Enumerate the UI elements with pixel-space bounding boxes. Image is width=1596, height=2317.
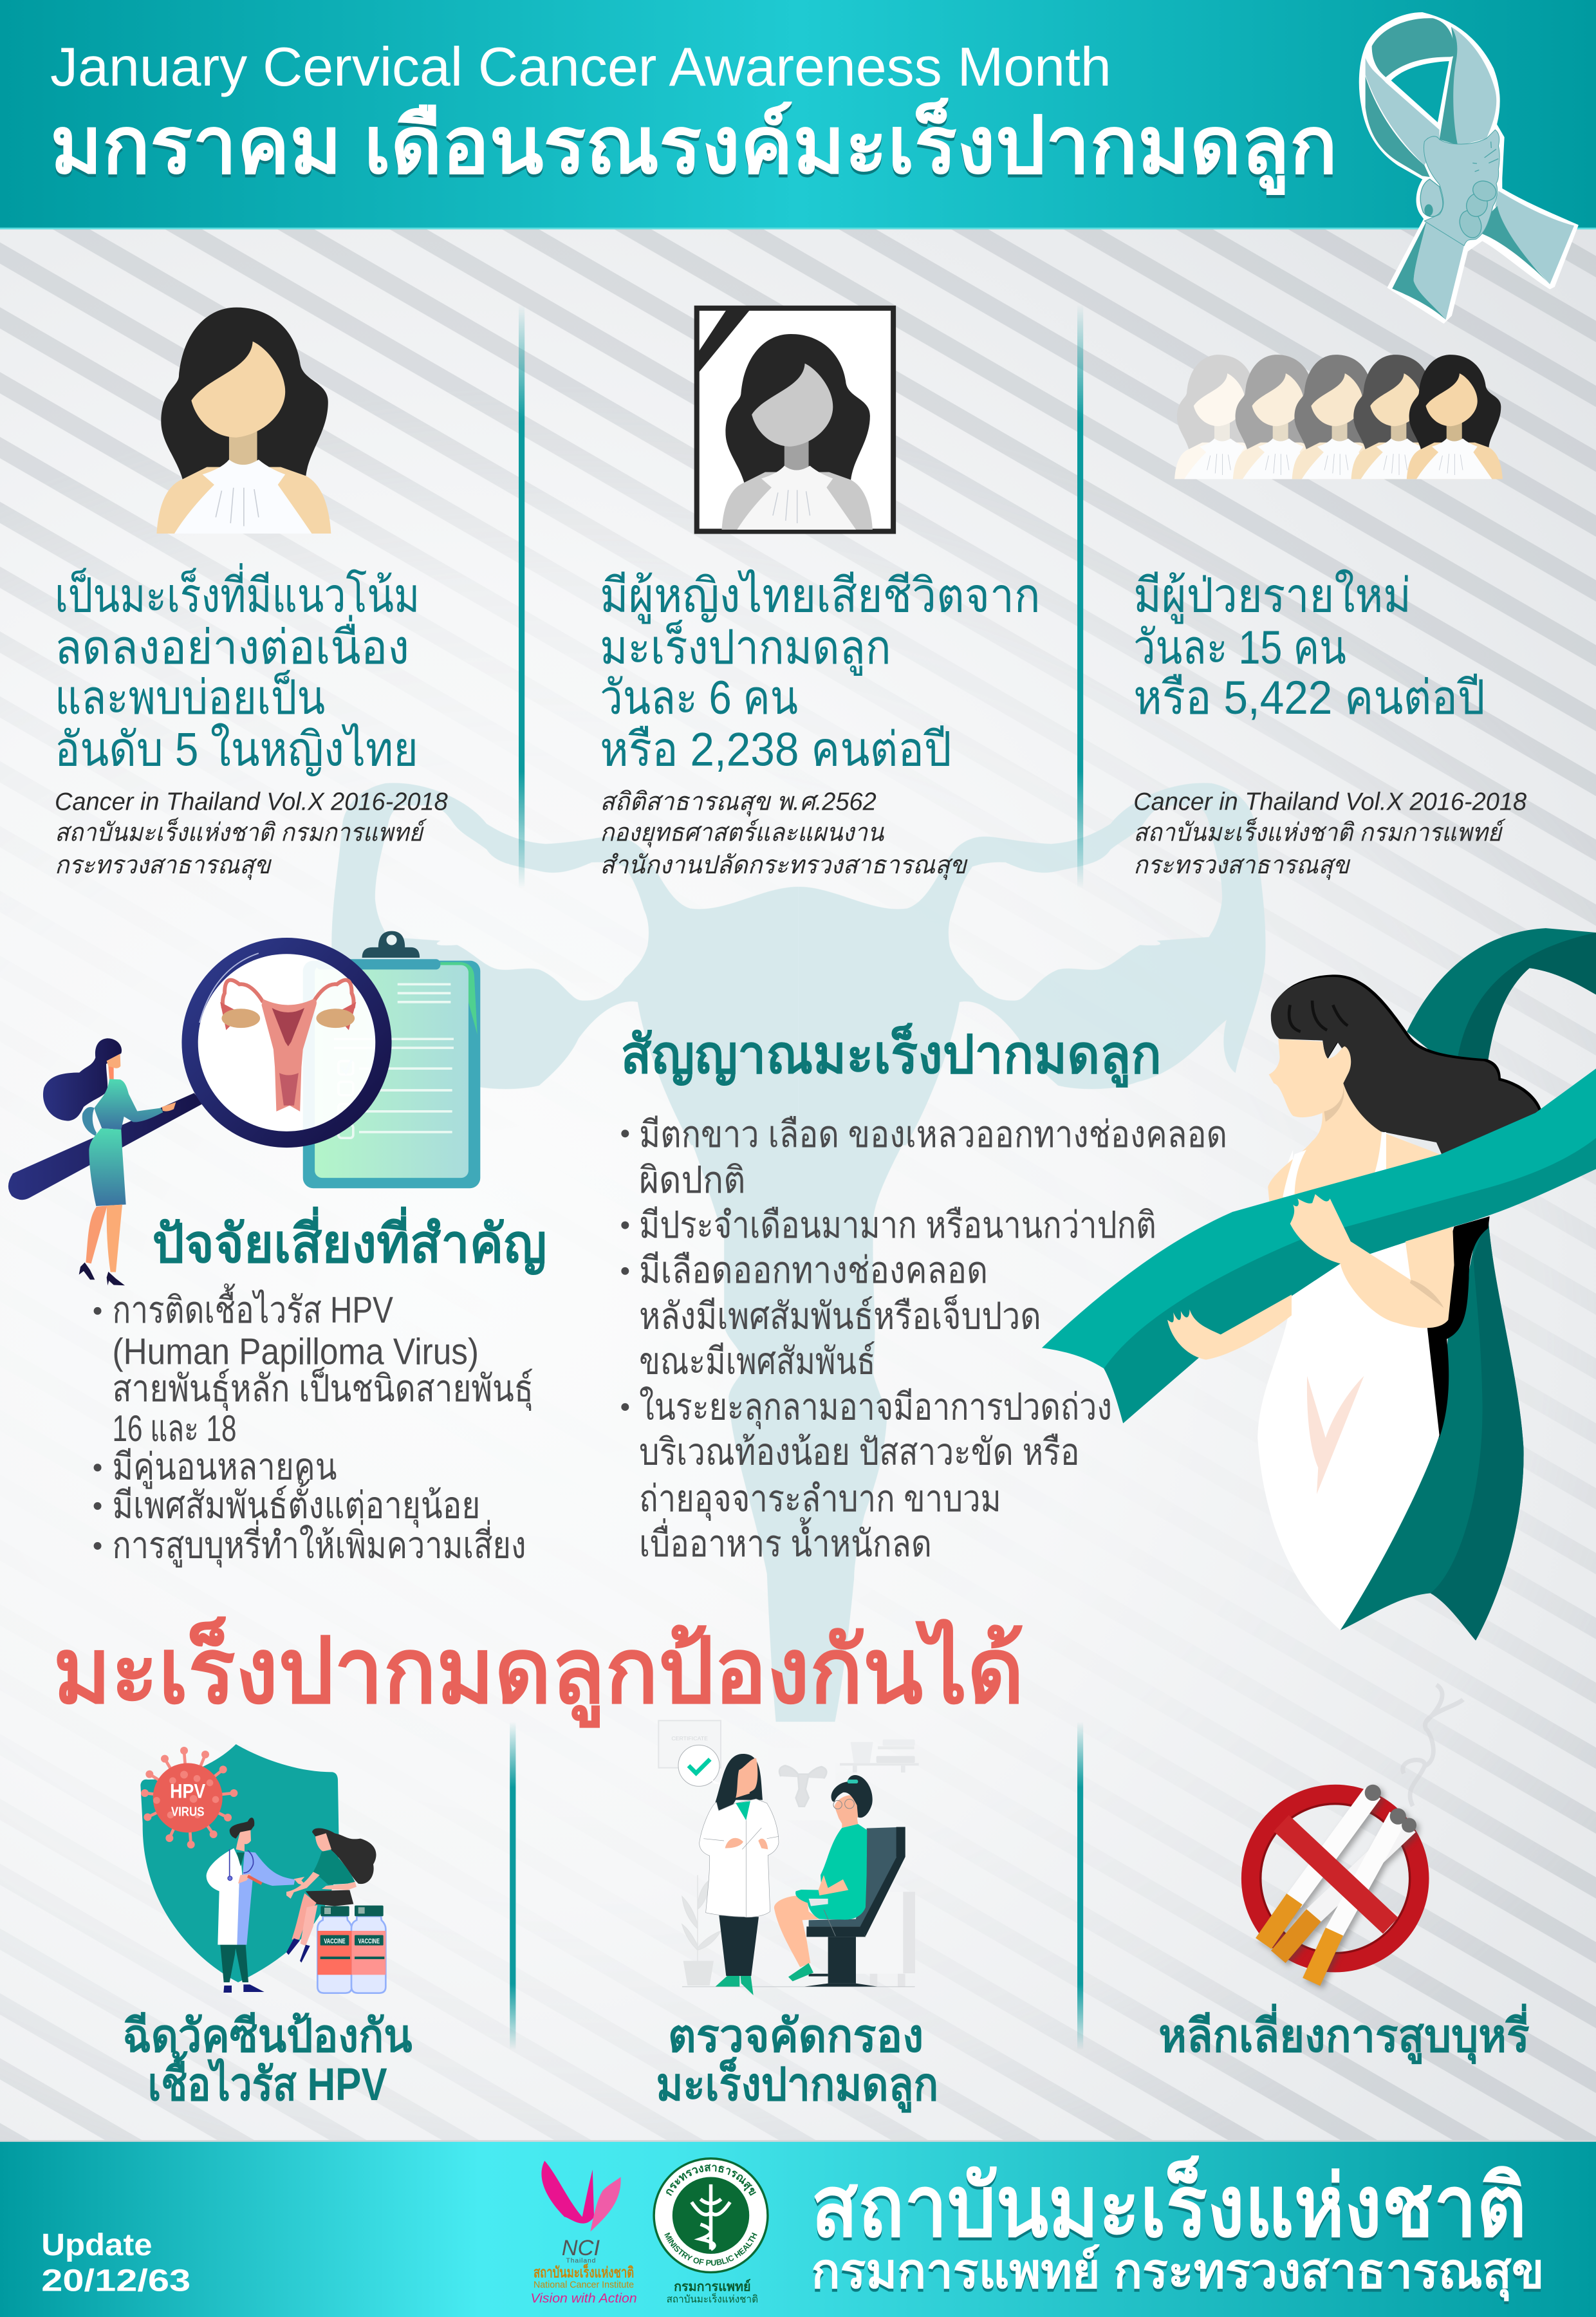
source text [55, 788, 448, 880]
statistic text: วันละ 6 คน [600, 671, 798, 724]
statistic text: ลดลงอย่างต่อเนื่อง [55, 615, 409, 674]
panel: vaccination [123, 1744, 413, 2110]
caption: screening [656, 2011, 938, 2113]
figure: patient in chair [774, 1775, 905, 1987]
risk factor list: มีเพศสัมพันธ์ตั้งแต่อายุน้อย [113, 1478, 480, 1528]
warning signs list: ถ่ายอุจจาระลำบาก ขาบวม [639, 1478, 1001, 1521]
hair [1271, 974, 1542, 1156]
source text: Cancer in Thailand Vol.X 2016-2018 [55, 788, 448, 815]
source text: Cancer in Thailand Vol.X 2016-2018 [1133, 788, 1526, 815]
illustration: clipboard and magnifier [8, 931, 480, 1285]
statistic text: มีผู้หญิงไทยเสียชีวิตจาก [600, 569, 1041, 624]
panel: avoid smoking [1158, 1685, 1530, 2064]
logo: Ministry of Public Health seal: กรมการแพทย์ [674, 2278, 751, 2294]
dividers: bottom row [510, 1722, 1083, 2050]
statistic text: อันดับ 5 ในหญิงไทย [55, 722, 418, 776]
warning signs list: หลังมีเพศสัมพันธ์หรือเจ็บปวด [639, 1294, 1041, 1337]
ribbon back loop [1407, 928, 1596, 1072]
logo: National Cancer Institute: Vision with Action [530, 2291, 637, 2306]
source text: กระทรวงสาธารณสุข [55, 851, 272, 880]
icon: memorial portrait [697, 308, 893, 532]
risk factor list: 16 และ 18 [113, 1408, 236, 1449]
logo: Ministry of Public Health seal: สถาบันมะเร็งแห่งชาติ [667, 2293, 758, 2305]
logo: Ministry of Public Health seal [653, 2157, 769, 2305]
icon: HPV virus [141, 1747, 237, 1848]
icon: prohibition ring [1251, 1794, 1420, 1962]
panel: new cases statistic [1133, 355, 1526, 880]
statistic text: หรือ 2,238 คนต่อปี [600, 722, 952, 776]
update date: 20/12/63 [41, 2263, 190, 2298]
warning signs list: บริเวณท้องน้อย ปัสสาวะขัด หรือ [639, 1432, 1079, 1473]
source text: สถาบันมะเร็งแห่งชาติ กรมการแพทย์ [55, 817, 427, 847]
logo: National Cancer Institute: สถาบันมะเร็งแห่งชาติ [534, 2263, 634, 2281]
icon: HPV virus: HPV [170, 1779, 205, 1802]
logo: National Cancer Institute: Thailand [566, 2258, 596, 2265]
risk factor list: สายพันธุ์หลัก เป็นชนิดสายพันธุ์ [113, 1366, 534, 1411]
panel: screening [656, 1720, 938, 2113]
panel: trend statistic [55, 308, 448, 880]
icon: prohibition bar [1281, 1823, 1391, 1926]
heading: key risk factors: ปัจจัยเสี่ยงที่สำคัญ [153, 1206, 547, 1276]
source text: สถิติสาธารณสุข พ.ศ.2562 [600, 788, 877, 817]
caption: vaccination: ฉีดวัคซีนป้องกัน [123, 2011, 413, 2061]
figure: woman with magnifier [43, 1038, 176, 1285]
risk factor list: มีคู่นอนหลายคน [113, 1447, 337, 1489]
faded clinic background: CERTIFICATE [671, 1735, 708, 1742]
heading: warning signs: สัญญาณมะเร็งปากมดลูก [620, 1022, 1162, 1088]
icon: HPV virus: VIRUS [171, 1805, 205, 1819]
icon: vaccine bottles [317, 1906, 385, 1993]
statistic text: เป็นมะเร็งที่มีแนวโน้ม [55, 563, 420, 622]
icon: vaccine bottles: VACCINE [324, 1937, 346, 1945]
statistic text [1133, 569, 1485, 724]
figure: patient [286, 1828, 376, 1962]
statistic text [600, 569, 1041, 776]
logo: Ministry of Public Health seal: กระทรวงสาธารณสุข [666, 2164, 756, 2196]
figure: doctor [700, 1754, 779, 1995]
icon: vaccine bottles: VACCINE [358, 1937, 380, 1945]
icon: awareness ribbon with hands [1360, 13, 1578, 323]
icon: magnifying glass [8, 946, 384, 1200]
faded clinic background [658, 1720, 919, 1987]
header banner [0, 0, 1596, 229]
caption: vaccination: เชื้อไวรัส HPV [148, 2051, 387, 2110]
statistic text: และพบบ่อยเป็น [55, 670, 325, 724]
statistic text: หรือ 5,422 คนต่อปี [1133, 671, 1485, 724]
icon: clipboard [303, 931, 480, 1188]
icon: cigarettes [1263, 1785, 1416, 1982]
ribbon band front [1042, 1068, 1596, 1423]
institute name [812, 2155, 1545, 2302]
statistic text: วันละ 15 คน [1133, 620, 1346, 674]
risk factor list: การติดเชื้อไวรัส HPV [113, 1283, 393, 1331]
risk factor list: (Human Papilloma Virus) [113, 1331, 479, 1372]
icon: uterus anatomy [220, 980, 356, 1112]
body and dress [1257, 1150, 1440, 1630]
risk factor list [94, 1283, 534, 1568]
institute name: สถาบันมะเร็งแห่งชาติ [812, 2155, 1526, 2255]
icon: woman [156, 308, 331, 534]
heading: cervical cancer is preventable: มะเร็งปากมดลูกป้องกันได้ [53, 1615, 1024, 1728]
face and neck [1268, 1039, 1443, 1219]
source text: กองยุทธศาสตร์และแผนงาน [600, 819, 884, 848]
illustration: shield, virus, doctor, patient, bottles [140, 1744, 385, 1993]
icon: check bubble [678, 1745, 721, 1786]
warning signs list: เบื่ออาหาร น้ำหนักลด [639, 1517, 932, 1565]
English title: January Cervical Cancer Awareness Month [50, 37, 1111, 98]
Thai title: มกราคม เดือนรณรงค์มะเร็งปากมดลูก [50, 97, 1337, 195]
logo: National Cancer Institute [530, 2161, 637, 2306]
icon: five women [1174, 355, 1503, 479]
warning signs list: มีประจำเดือนมามาก หรือนานกว่าปกติ [639, 1205, 1156, 1246]
figure: doctor [207, 1818, 295, 1993]
panel: deaths statistic [600, 308, 1041, 880]
warning signs list: ขณะมีเพศสัมพันธ์ [639, 1341, 876, 1382]
warning signs list: มีตกขาว เลือด ของเหลวออกทางช่องคลอด [639, 1114, 1227, 1155]
belly mark [1307, 1376, 1364, 1494]
icon: smoke [1403, 1685, 1463, 1806]
hair shadow behind figure [1425, 1216, 1490, 1438]
faint uterus silhouette [331, 783, 1266, 1722]
statistic text: มีผู้ป่วยรายใหม่ [1133, 569, 1411, 624]
risk factor list: การสูบบุหรี่ทำให้เพิ่มความเสี่ยง [113, 1520, 526, 1568]
source text: กระทรวงสาธารณสุข [1133, 851, 1351, 880]
warning signs list [621, 1114, 1227, 1565]
illustration: woman with teal ribbon [1042, 928, 1596, 1641]
dividers: top row [519, 304, 1083, 888]
logo: National Cancer Institute: National Cancer Institute [534, 2280, 634, 2291]
caption: screening: ตรวจคัดกรอง [668, 2011, 923, 2061]
logo: Ministry of Public Health seal: MINISTRY OF PUBLIC HEALTH [664, 2232, 757, 2266]
source text [600, 788, 968, 880]
icon: shield [140, 1744, 339, 1982]
warning signs list: ในระยะลุกลามอาจมีอาการปวดถ่วง [639, 1386, 1112, 1430]
caption: vaccination [123, 2011, 413, 2110]
warning signs list: ผิดปกติ [639, 1160, 745, 1201]
caption: avoid smoking: หลีกเลี่ยงการสูบบุหรี่ [1158, 2003, 1530, 2064]
source text [1133, 788, 1526, 880]
update date [41, 2228, 190, 2298]
institute name: กรมการแพทย์ กระทรวงสาธารณสุข [812, 2244, 1545, 2302]
update date: Update [41, 2228, 153, 2262]
statistic text [55, 563, 420, 776]
ribbon tail [1341, 1216, 1524, 1641]
arms and hands [1290, 1194, 1454, 1328]
warning signs list: มีเลือดออกทางช่องคลอด [639, 1250, 988, 1291]
footer banner [0, 2140, 1596, 2317]
statistic text: มะเร็งปากมดลูก [600, 620, 891, 676]
caption: screening: มะเร็งปากมดลูก [656, 2057, 938, 2113]
illustration: clinic scene [658, 1720, 919, 1995]
source text: สำนักงานปลัดกระทรวงสาธารณสุข [600, 851, 968, 880]
logo: National Cancer Institute: NCI [562, 2236, 600, 2260]
source text: สถาบันมะเร็งแห่งชาติ กรมการแพทย์ [1133, 817, 1507, 847]
